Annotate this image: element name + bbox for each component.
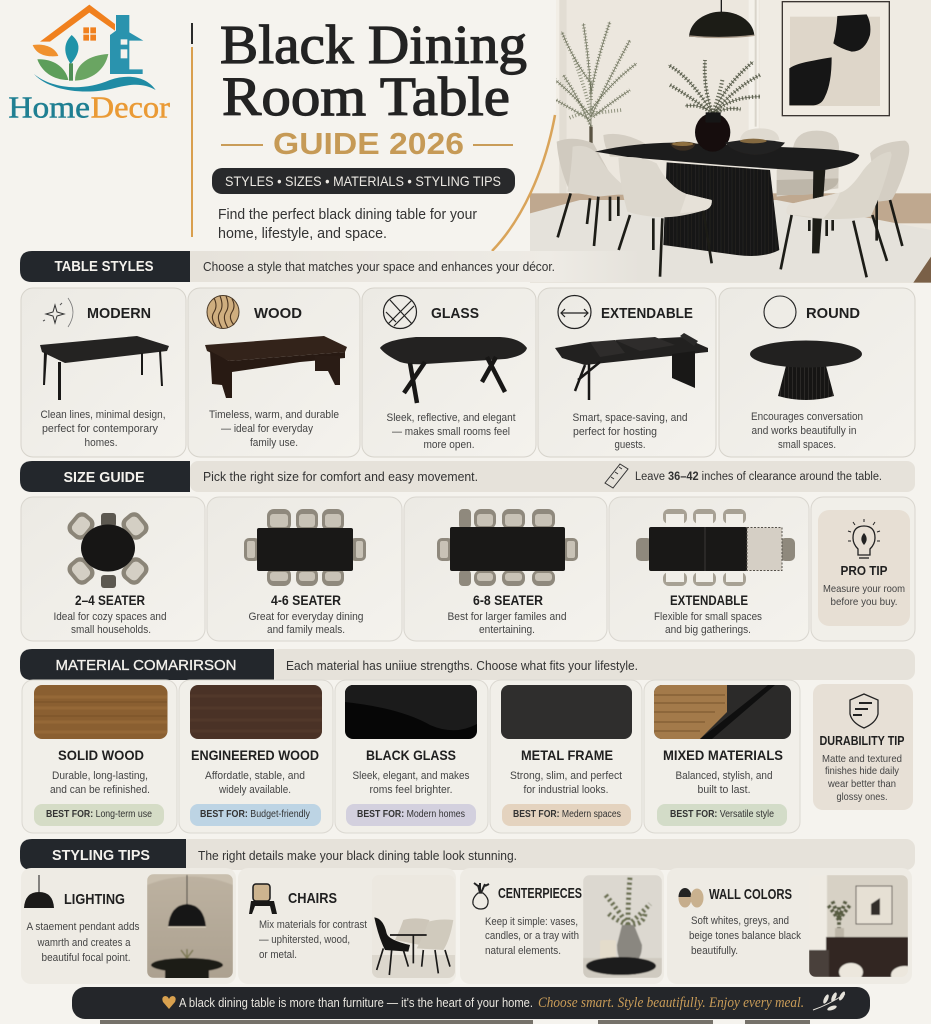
card: solid wood: Durable, long-lasting, [52,770,148,782]
card: metal frame [490,680,642,833]
vertical divider [191,23,193,237]
icon: ruler [605,464,628,488]
title [220,14,527,127]
table: wood [205,336,347,398]
bottom edge band [100,1020,810,1024]
card: black glass: roms feel brighter. [370,784,452,796]
card: extendable: guests. [614,439,646,451]
card: modern: MODERN [87,305,151,322]
panel: pro tip: before you buy. [830,596,898,608]
section header: styling tips [20,839,915,870]
subtitle: guide 2026: GUIDE 2026 [273,126,464,161]
icon: paint swatches [678,888,704,908]
logo: Home [8,90,90,124]
card: solid wood: and can be refinished. [50,784,150,796]
card: 6-8 seater: Best for larger familes and [448,611,566,623]
icon: glass [384,296,416,328]
card: chairs: Mix materials for contrast [259,919,367,931]
intro text: home, lifestyle, and space. [218,226,387,242]
photo: vase with plant [583,875,662,978]
card: engineered wood: Affordatle, stable, and [205,770,305,782]
card: wood: family use. [250,437,298,449]
card: mixed materials: Balanced, stylish, and [676,770,772,782]
card: black glass: BLACK GLASS [366,747,456,763]
section header: material comparison [20,649,915,680]
best for pill [657,804,787,826]
icon: light bulb [848,519,880,558]
closing banner [72,987,870,1019]
best for pill: BEST FOR: Modern homes [357,809,465,820]
panel: pro tip [811,497,915,641]
table: glass [380,337,527,403]
panel: durability tip: finishes hide daily [825,765,900,777]
intro text [218,207,477,242]
card: lighting: LIGHTING [64,891,125,908]
topics pill [212,168,515,194]
card: extendable: EXTENDABLE [601,305,693,322]
card: modern [21,288,186,457]
card: chairs: CHAIRS [288,890,337,907]
icon: wood grain [207,296,239,328]
plan: round table [64,509,152,588]
card: 4-6 seater: and family meals. [267,624,345,636]
card: mixed materials: MIXED MATERIALS [663,747,783,763]
card: centerpieces: CENTERPIECES [498,885,582,902]
card: modern: Clean lines, minimal design, [40,409,166,421]
card: lighting [21,868,236,984]
swatch: engineered wood [190,685,322,739]
card: round: small spaces. [778,439,836,451]
card: 2-4 seater [21,497,205,641]
card: 4-6 seater [207,497,402,641]
panel: pro tip: PRO TIP [840,563,888,578]
section header: material comparison: Each material has uniiue strengths. Choose what fits your lifestyle. [286,658,638,673]
card: engineered wood: ENGINEERED WOOD [191,747,319,763]
card: wall colors [667,868,919,984]
best for pill [190,804,321,826]
card: wood: WOOD [254,305,302,322]
swatch: metal frame [501,685,632,739]
icon: extend arrows [558,296,591,328]
card: round [719,288,915,457]
card: wood: Timeless, warm, and durable [209,409,339,421]
panel: durability tip: DURABILITY TIP [820,733,905,748]
table: modern [40,336,169,400]
card: round: Encourages conversation [751,411,863,423]
swatch: mixed materials [654,685,791,739]
card: extendable plan: Flexible for small spaces [654,611,762,623]
card: extendable [538,288,716,457]
card: wall colors: WALL COLORS [709,886,792,903]
card: 2-4 seater: Ideal for cozy spaces and [54,611,166,623]
card: 2-4 seater: small households. [71,624,151,636]
card: centerpieces: natural elements. [485,945,561,957]
closing banner: Choose smart. Style beautifully. Enjoy every meal. [538,995,804,1011]
panel: durability tip: wear better than [827,778,896,790]
swatch: black glass [345,685,477,739]
card: lighting: wamrth and creates a [37,937,131,949]
card: chairs: or metal. [259,949,297,961]
icon: chair [249,884,277,914]
plan: rectangular table [244,509,366,586]
card: extendable: perfect for hosting [573,426,657,438]
card: 6-8 seater [404,497,607,641]
panel: pro tip: Measure your room [823,583,905,595]
hero text panel [0,0,556,251]
card: 6-8 seater: entertaining. [479,624,535,636]
card: modern: homes. [84,437,118,449]
card: chairs: — uphitersted, wood, [259,934,350,946]
best for pill [502,804,631,826]
hero photo: dining room [530,0,931,285]
icon: sparkle [43,298,73,327]
card: lighting: beautiful focal point. [42,952,130,964]
topics pill: STYLES • SIZES • MATERIALS • STYLING TIPS [225,173,501,189]
card: mixed materials: built to last. [698,784,750,796]
intro text: Find the perfect black dining table for your [218,207,477,223]
card: glass: more open. [424,439,474,451]
section header: styling tips: STYLING TIPS [52,847,150,864]
best for pill: BEST FOR: Long-term use [46,809,152,820]
card: wall colors: beautifully. [691,945,738,957]
panel: durability tip: glossy ones. [836,791,888,803]
photo: chairs [372,917,455,978]
best for pill: BEST FOR: Medern spaces [513,809,621,820]
section header: table styles: Choose a style that matches your space and enhances your décor. [203,260,555,274]
title: Room Table [222,66,510,127]
photo: pendant [147,874,233,980]
section header: styling tips: The right details make your black dining table look stunning. [198,848,517,863]
card: mixed materials [644,680,800,833]
card: 2-4 seater: 2–4 SEATER [75,593,145,608]
logo [8,5,170,124]
card: solid wood: SOLID WOOD [58,747,144,763]
section header: material comparison: MATERIAL COMARIRSON [56,657,236,674]
icon: pendant lamp [24,875,54,908]
icon: sprig [813,991,846,1012]
clearance note: Leave 36–42 inches of clearance around the table. [635,471,882,483]
icon: shield [850,694,878,728]
card: modern: perfect for contemporary [42,423,158,435]
card: extendable plan: and big gatherings. [665,624,751,636]
photo: styled wall [809,875,908,977]
best for pill: BEST FOR: Versatile style [670,809,774,820]
card: metal frame: METAL FRAME [521,747,613,763]
table: extendable [555,333,708,400]
card: glass: GLASS [431,305,479,322]
card: solid wood [22,680,177,833]
best for pill [346,804,476,826]
card: wall colors: beige tones balance black [689,930,801,942]
card: wall colors: Soft whites, greys, and [691,915,789,927]
card: 4-6 seater: 4-6 SEATER [271,593,341,608]
card: lighting: A staement pendant adds [26,921,140,933]
card: metal frame: for industrial looks. [524,784,608,796]
card: metal frame: Strong, slim, and perfect [510,770,622,782]
plan: long table [437,509,578,586]
closing banner: A black dining table is more than furniture — it's the heart of your home. [179,995,533,1010]
best for pill: BEST FOR: Budget-friendly [200,809,310,820]
card: extendable plan [609,497,809,641]
best for pill [34,804,164,826]
card: 4-6 seater: Great for everyday dining [248,611,364,623]
card: extendable: Smart, space-saving, and [572,412,688,424]
section header: table styles: TABLE STYLES [54,258,154,275]
icon: vase [473,883,489,909]
card: glass [362,288,536,457]
gold curve [492,115,555,251]
card: engineered wood: widely available. [218,784,291,796]
card: glass: — makes small rooms feel [392,426,510,438]
card: glass: Sleek, reflective, and elegant [386,412,516,424]
card: chairs [238,868,456,984]
card: extendable plan: EXTENDABLE [670,593,748,608]
card: wood: — ideal for everyday [221,423,313,435]
swatch: solid wood [34,685,168,739]
section header: table styles [20,251,640,282]
card: round: ROUND [806,305,860,322]
card: 6-8 seater: 6-8 SEATER [473,593,543,608]
card: black glass: Sleek, elegant, and makes [352,770,470,782]
card: round: and works beautifully in [752,425,856,437]
card: centerpieces [460,868,664,984]
icon: heart [162,996,176,1009]
panel: durability tip [813,684,913,810]
card: wood [188,288,360,457]
section header: size guide: SIZE GUIDE [64,469,144,486]
table: round [750,340,862,400]
section header: size guide [20,461,915,492]
logo: Decor [91,90,170,124]
card: centerpieces: candles, or a tray with [485,930,579,942]
icon: circle [764,296,796,328]
plan: extendable table [636,509,795,586]
card: black glass [335,680,488,833]
section header: size guide: Pick the right size for comfort and easy movement. [203,469,478,484]
card: centerpieces: Keep it simple: vases, [485,916,578,928]
title: Black Dining [220,14,527,75]
panel: durability tip: Matte and textured [822,753,902,765]
card: engineered wood [179,680,333,833]
